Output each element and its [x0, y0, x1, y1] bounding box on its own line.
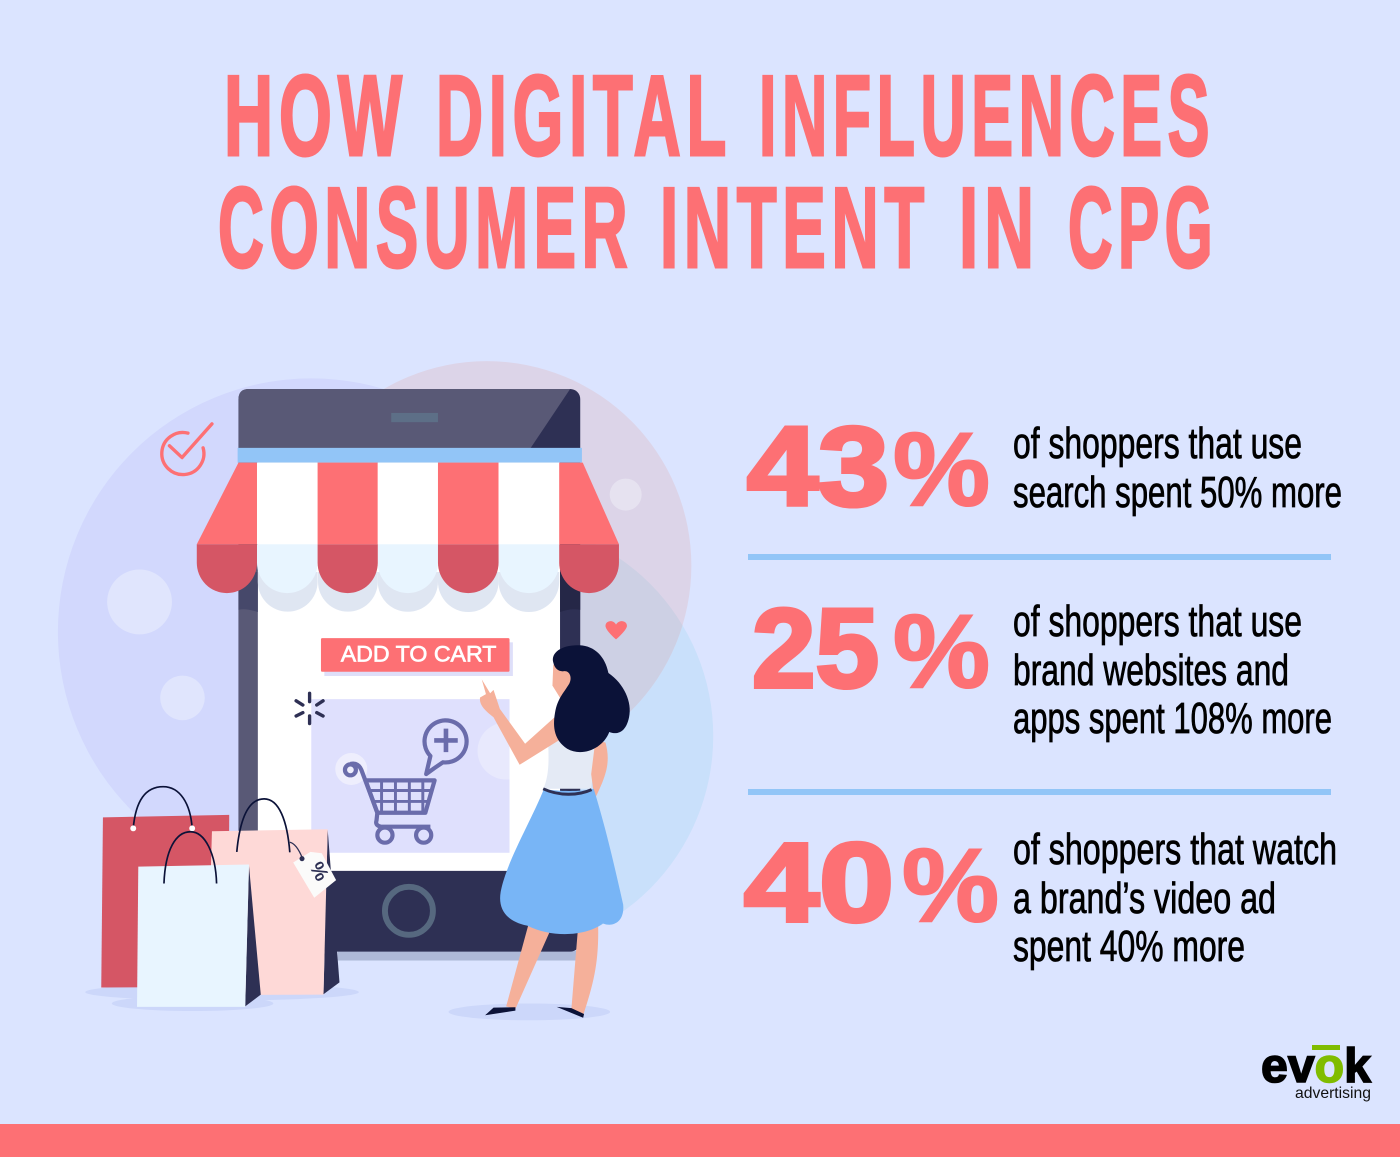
divider [748, 789, 1331, 795]
logo: evok advertising: evok [1261, 1040, 1371, 1093]
background circles [58, 361, 713, 952]
stat 3 description: a brand’s video ad [1013, 874, 1276, 923]
add to cart button: ADD TO CART [341, 642, 496, 667]
stat 1 description [1013, 419, 1342, 517]
bottom band [0, 1124, 1400, 1157]
icon: check mark [162, 424, 212, 475]
stat 3: 40% [744, 820, 1337, 971]
stat 3 description [1013, 825, 1337, 971]
stat 3: 40%: % [902, 828, 999, 944]
stat 1 description: of shoppers that use [1013, 419, 1302, 468]
divider [748, 554, 1331, 560]
logo: evok advertising: advertising [1295, 1085, 1371, 1102]
stat 2: 25% [752, 586, 1332, 743]
stat 1: 43%: % [893, 412, 990, 528]
illustration: storefront phone with shopper [58, 361, 713, 1020]
title: CPG [1068, 165, 1218, 292]
far arm [591, 740, 608, 799]
shopping bags [101, 787, 339, 1007]
legs [506, 917, 598, 1014]
white bag [137, 832, 261, 1007]
raised arm [480, 679, 559, 765]
price tag: % [305, 859, 333, 885]
phone [238, 389, 580, 961]
awning [197, 448, 619, 612]
home button [385, 887, 433, 935]
add to cart button [321, 638, 513, 676]
title: IN [959, 165, 1040, 292]
title: HOW [224, 53, 408, 180]
price tag [290, 842, 336, 898]
stat 3 description: spent 40% more [1013, 922, 1245, 971]
red bag [101, 787, 229, 987]
pink bag [207, 799, 339, 995]
icon: speech bubble plus [425, 720, 467, 774]
stat 2 description [1013, 597, 1332, 743]
stat 2: 25%: % [893, 594, 990, 710]
skirt [500, 789, 623, 934]
waist belt [543, 789, 592, 794]
shoes [485, 1007, 584, 1018]
stat 1: 43% [747, 404, 1342, 529]
icon: shopping cart [345, 764, 435, 843]
stat 2 description: of shoppers that use [1013, 597, 1302, 646]
face [552, 665, 571, 699]
title [218, 53, 1218, 292]
hair [553, 645, 630, 752]
stat 2: 25%: 25 [752, 586, 879, 711]
product panel with cart [311, 699, 510, 853]
stat 2 description: brand websites and [1013, 646, 1289, 695]
torso [543, 740, 597, 789]
stat 3: 40%: 40 [744, 820, 894, 945]
icon: sparkle [296, 693, 323, 724]
ground shadows [85, 984, 610, 1020]
title: INTENT [660, 165, 930, 292]
title: DIGITAL [436, 53, 732, 180]
title: CONSUMER [218, 165, 633, 292]
shopper woman [480, 645, 630, 1018]
icon: heart [605, 621, 627, 639]
stat 1: 43%: 43 [747, 404, 889, 529]
